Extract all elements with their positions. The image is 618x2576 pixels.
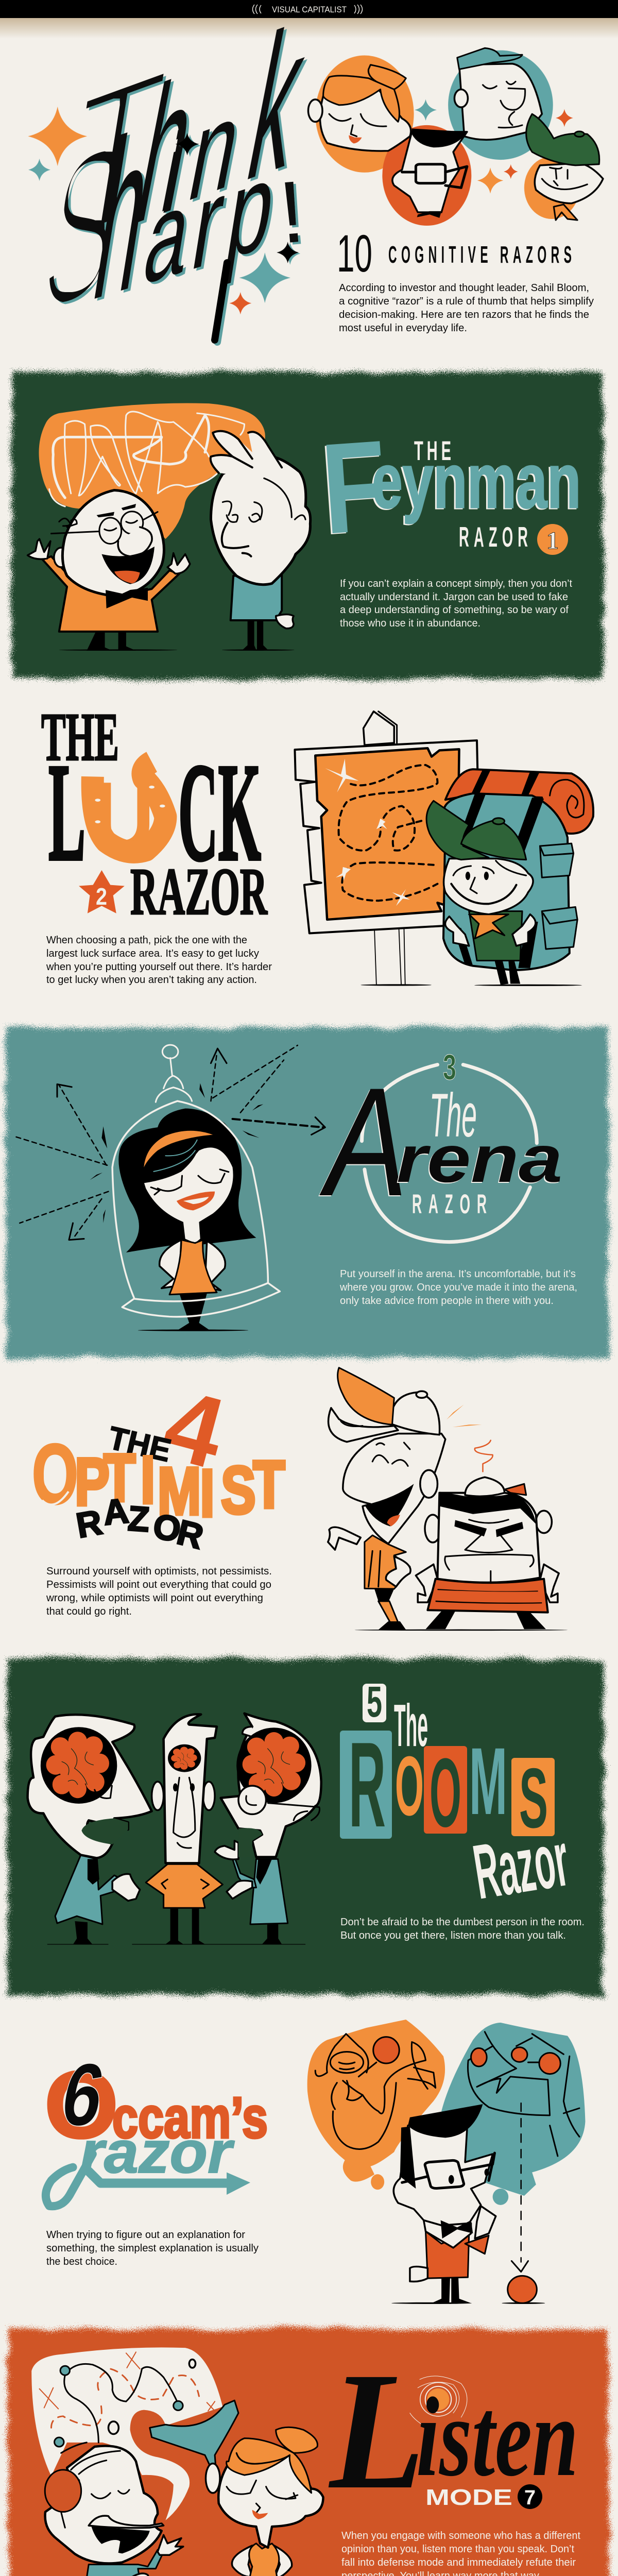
man with cap bbox=[454, 48, 542, 140]
header bar bbox=[0, 0, 618, 18]
number badge 5: 5 bbox=[367, 1677, 382, 1726]
body text: only take advice from people in there with you. bbox=[340, 1295, 554, 1307]
panel background bbox=[12, 372, 603, 679]
signpost bbox=[295, 711, 481, 985]
title: 5 The Rooms Razor: O bbox=[395, 1739, 424, 1833]
intro text: a cognitive “razor” is a rule of thumb that helps simplify bbox=[339, 296, 594, 307]
title: 5 The Rooms Razor: The bbox=[394, 1692, 428, 1759]
title: The 4 Optimist Razor bbox=[32, 1367, 285, 1556]
body text: actually understand it. Jargon can be used to fake bbox=[340, 591, 568, 603]
panel: Arena razor bbox=[6, 1028, 608, 1358]
body text: When you engage with someone who has a different bbox=[341, 2530, 580, 2541]
title: The Arena Razor bbox=[318, 1047, 562, 1242]
number badge 5 bbox=[363, 1677, 386, 1726]
body text: If you can’t explain a concept simply, then you don’t bbox=[340, 578, 572, 589]
illustration: optimist and pessimist bbox=[328, 1368, 568, 1631]
panel: Rooms razor bbox=[8, 1659, 604, 1995]
heading: 10 cognitive razors: 10 bbox=[337, 224, 372, 283]
illustration: scout at signpost map bbox=[295, 711, 593, 986]
title: Think Sharp: a bbox=[136, 160, 200, 312]
title: The Feynman Razor: F bbox=[317, 413, 391, 561]
woman bbox=[118, 1108, 256, 1330]
title: Think Sharp: n bbox=[179, 68, 252, 230]
title: 6 Occam's Razor: razor bbox=[80, 2120, 234, 2185]
left man bbox=[28, 1715, 152, 1944]
intro text bbox=[339, 282, 594, 334]
heading: 10 cognitive razors: COGNITIVE RAZORS bbox=[388, 241, 572, 268]
body text: the best choice. bbox=[46, 2256, 117, 2267]
number badge 7 bbox=[518, 2484, 542, 2509]
thought bubble: simple bbox=[441, 2023, 585, 2205]
section: Optimist razor bbox=[32, 1367, 568, 1631]
optimist character bbox=[328, 1368, 445, 1630]
icon: sound rings bbox=[410, 2376, 467, 2426]
title: The 4 Optimist Razor: THE bbox=[105, 1420, 174, 1469]
body text: wrong, while optimists will point out everything bbox=[46, 1592, 263, 1604]
ground shadow bbox=[138, 1329, 248, 1331]
title: The 4 Optimist Razor: RAZOR bbox=[73, 1491, 207, 1556]
ground shadows bbox=[59, 649, 295, 651]
title: Listen Mode 7: MODE bbox=[425, 2485, 512, 2510]
number badge 7: 7 bbox=[524, 2486, 536, 2509]
title: The Luck Razor bbox=[41, 699, 268, 929]
tile S bbox=[511, 1751, 555, 1845]
title: The Luck Razor: RAZOR bbox=[130, 855, 268, 929]
title: The Feynman Razor: THE bbox=[414, 436, 451, 466]
title: The Arena Razor: A bbox=[318, 1055, 408, 1228]
backpack bbox=[443, 769, 593, 970]
body text: to get lucky when you aren’t taking any action. bbox=[46, 974, 257, 986]
title: The Arena Razor: RAZOR bbox=[412, 1189, 487, 1219]
illustration: three men with brains bbox=[28, 1714, 321, 1944]
section: Occam's razor bbox=[44, 2020, 585, 2304]
funnel bbox=[150, 2400, 238, 2480]
title: 6 Occam's Razor: ccam’s bbox=[112, 2086, 268, 2150]
icon: broadcast waves bbox=[252, 5, 363, 14]
title: The Feynman Razor: RAZOR bbox=[459, 522, 528, 553]
scout boy bbox=[426, 801, 536, 985]
title: Think Sharp: p bbox=[218, 131, 285, 287]
tile O bbox=[424, 1738, 467, 1848]
body text bbox=[339, 1268, 577, 1307]
header brand name: VISUAL CAPITALIST bbox=[272, 5, 347, 14]
section: Luck razor: CK bbox=[178, 735, 261, 890]
fallen apple bbox=[502, 2276, 545, 2304]
body text bbox=[46, 935, 272, 986]
body text: opinion than you, listen more than you speak. Don’t bbox=[341, 2544, 574, 2555]
title: The Arena Razor: rena bbox=[397, 1121, 562, 1196]
color blobs bbox=[315, 50, 579, 226]
intro text: most useful in everyday life. bbox=[339, 323, 467, 334]
title: Think Sharp bbox=[29, 0, 322, 359]
title: 6 Occam's Razor: 6 bbox=[55, 2045, 111, 2144]
ring emblem bbox=[362, 1065, 537, 1242]
title: 5 The Rooms Razor: R bbox=[349, 1717, 386, 1852]
title: The Arena Razor: 3 bbox=[443, 1047, 456, 1087]
body text: When trying to figure out an explanation for bbox=[46, 2229, 245, 2241]
intro text: decision-making. Here are ten razors that he finds the bbox=[339, 309, 589, 320]
heading: 10 cognitive razors bbox=[337, 224, 572, 283]
man with glasses and beard bbox=[392, 128, 467, 218]
intro text: According to investor and thought leader, Sahil Bloom, bbox=[339, 282, 589, 294]
decorative sparkles bbox=[28, 99, 573, 314]
body text bbox=[46, 1566, 272, 1617]
illustration: woman under glass dome bbox=[16, 1045, 325, 1331]
title: Think Sharp: S bbox=[29, 94, 138, 359]
laughing man bbox=[28, 490, 190, 651]
panel: Feynman razor bbox=[12, 372, 603, 679]
tile R bbox=[340, 1717, 392, 1852]
body text bbox=[341, 2530, 580, 2576]
title: 5 The Rooms Razor: M bbox=[469, 1728, 507, 1835]
scout boy bbox=[526, 114, 603, 220]
thought bubble: complicated bbox=[307, 2020, 445, 2190]
body text: But once you get there, listen more than you talk. bbox=[340, 1930, 566, 1941]
title: 6 Occam's Razor bbox=[44, 2045, 268, 2206]
body text: largest luck surface area. It’s easy to get lucky bbox=[46, 948, 259, 959]
top aged paper edge bbox=[0, 18, 618, 39]
body text: When choosing a path, pick the one with the bbox=[46, 935, 247, 946]
ground shadow bbox=[355, 1630, 568, 1631]
action ticks bbox=[447, 1404, 482, 1427]
body text bbox=[340, 1917, 585, 1941]
illustration: funnel and listener bbox=[31, 2347, 323, 2576]
ground shadows bbox=[360, 984, 582, 986]
number badge 1 bbox=[537, 524, 568, 555]
speech bubble bbox=[31, 2347, 222, 2520]
right man bbox=[215, 1714, 321, 1944]
title: The Arena Razor: The bbox=[430, 1081, 477, 1150]
title: Think Sharp: ! bbox=[276, 162, 308, 262]
body text bbox=[340, 578, 572, 629]
speech bubble bbox=[39, 403, 265, 539]
title: The Luck Razor: U bbox=[94, 762, 154, 871]
number badge 1: 1 bbox=[546, 527, 559, 554]
body text: when you’re putting yourself out there. It’s harder bbox=[46, 961, 272, 973]
steam squiggle bbox=[475, 1440, 493, 1471]
panel: Listen mode bbox=[8, 2329, 609, 2576]
number badge 2 star: 2 bbox=[96, 883, 107, 910]
title: The Luck Razor: THE bbox=[41, 699, 119, 775]
body text bbox=[46, 2229, 259, 2267]
confused man bbox=[211, 431, 311, 650]
body text: those who use it in abundance. bbox=[340, 618, 480, 629]
title: The 4 Optimist Razor: PTIMIST bbox=[75, 1440, 285, 1531]
body text: a deep understanding of something, so be wary of bbox=[340, 604, 569, 616]
title: The Feynman Razor bbox=[317, 413, 581, 561]
letter O smiley: O bbox=[32, 1427, 78, 1521]
title: Think Sharp: i bbox=[152, 106, 194, 238]
illustration: man thinking about apple bbox=[307, 2020, 585, 2304]
title: Think Sharp: T bbox=[51, 21, 179, 288]
number badge 2 star bbox=[79, 870, 125, 913]
panel background bbox=[8, 2329, 609, 2576]
title: 5 The Rooms Razor bbox=[340, 1677, 574, 1916]
title: The 4 Optimist Razor: 4 bbox=[153, 1367, 236, 1490]
body text: Pessimists will point out everything that could go bbox=[46, 1579, 271, 1590]
woman with bun bbox=[308, 65, 411, 151]
ground shadow bbox=[391, 2302, 472, 2304]
title: Think Sharp: r bbox=[184, 150, 233, 297]
speaking man bbox=[45, 2443, 183, 2576]
title: Listen Mode 7: L bbox=[327, 2337, 425, 2524]
title: Think Sharp: h bbox=[81, 82, 165, 348]
treasure map bbox=[315, 748, 459, 920]
body text: something, the simplest explanation is usually bbox=[46, 2243, 259, 2254]
body text: Don’t be afraid to be the dumbest person in the room. bbox=[340, 1917, 585, 1928]
listening woman bbox=[205, 2427, 323, 2576]
title: Think Sharp: h bbox=[123, 32, 210, 266]
body text: where you grow. Once you’ve made it into the arena, bbox=[339, 1282, 577, 1293]
body text: that could go right. bbox=[46, 1606, 132, 1617]
section: intro bbox=[28, 0, 603, 359]
body text: Put yourself in the arena. It’s uncomfortable, but it’s bbox=[340, 1268, 576, 1280]
title: 6 Occam's Razor: O bbox=[44, 2052, 118, 2158]
glass dome bbox=[112, 1045, 280, 1317]
dashed fall line bbox=[511, 2103, 528, 2272]
body text: Surround yourself with optimists, not pessimists. bbox=[46, 1566, 272, 1577]
illustration: four character portraits bbox=[308, 48, 603, 226]
illustration: Feynman characters bbox=[28, 403, 311, 651]
body text: fall into defense mode and immediately refute their bbox=[341, 2557, 576, 2568]
thinking man bbox=[393, 2104, 496, 2303]
title: 5 The Rooms Razor: O bbox=[430, 1738, 461, 1848]
section: Luck razor bbox=[41, 699, 593, 986]
title: Listen Mode 7 bbox=[327, 2337, 578, 2524]
title: The Luck Razor: L bbox=[48, 735, 85, 890]
panel background bbox=[6, 1028, 608, 1358]
arrow swash bbox=[46, 2154, 250, 2206]
middle man bbox=[146, 1714, 222, 1944]
dashed arrows bbox=[16, 1045, 325, 1240]
icon: horseshoe detail bbox=[93, 762, 165, 852]
tile S: S bbox=[519, 1751, 548, 1845]
tangled scribble bbox=[49, 412, 244, 506]
panel background bbox=[8, 1659, 604, 1995]
pessimist character bbox=[416, 1477, 559, 1629]
